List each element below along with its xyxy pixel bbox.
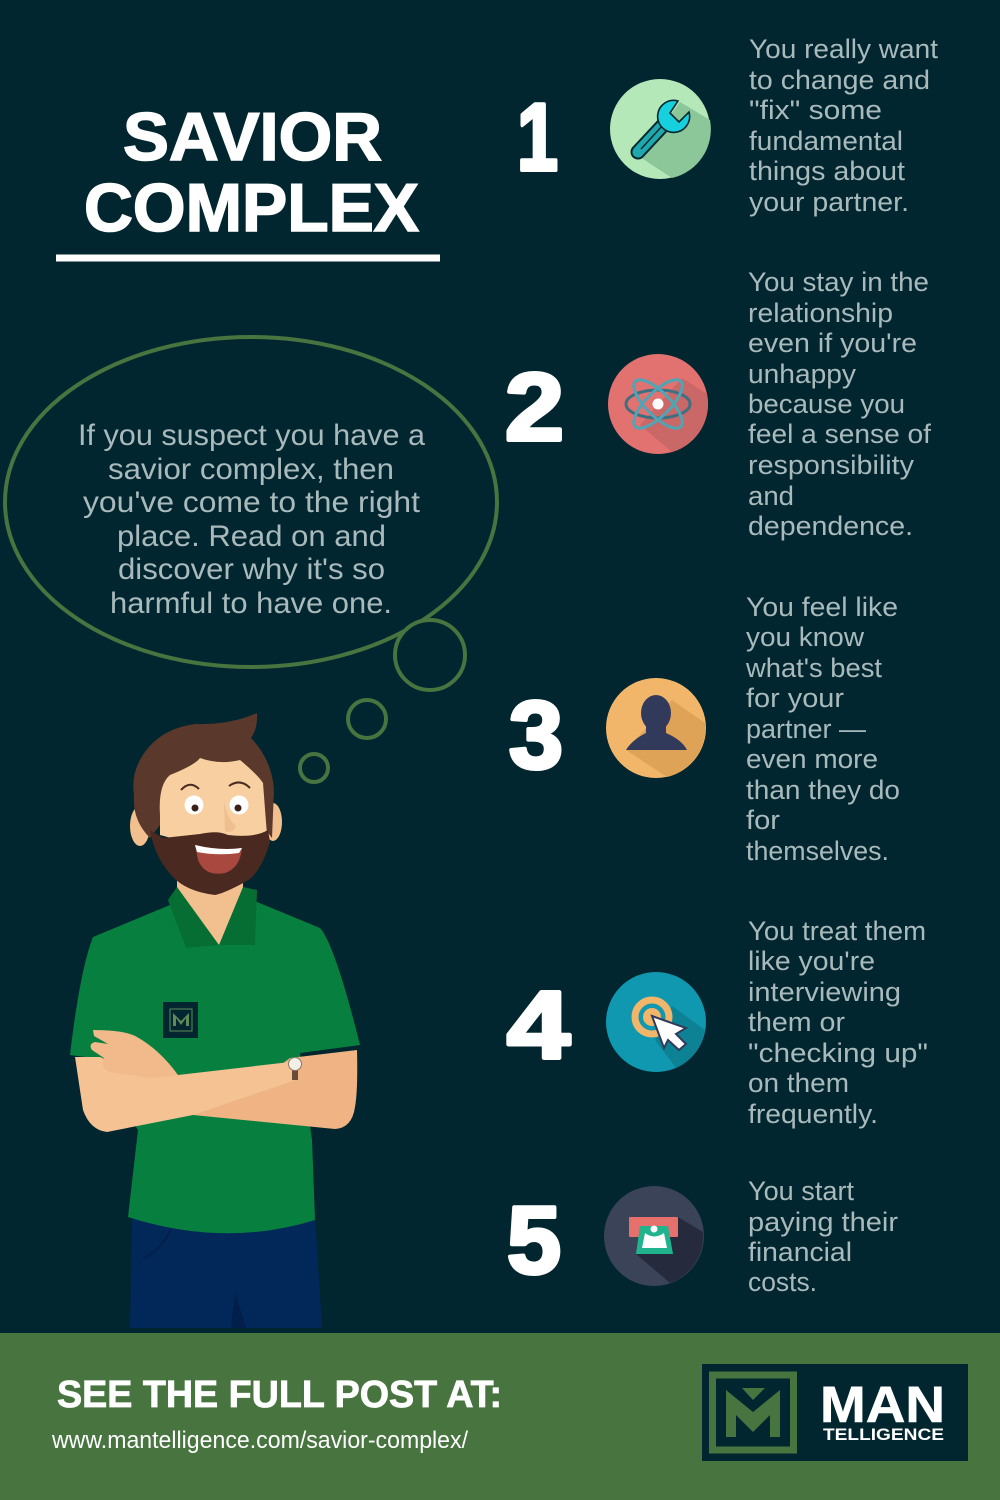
shirt: [70, 902, 360, 1233]
eyes: [181, 782, 250, 814]
text 3: You feel like: [746, 592, 898, 622]
text 2: because you: [748, 389, 905, 419]
number 5: 5: [507, 1187, 561, 1294]
collar: [168, 887, 257, 948]
text 4: "checking up": [748, 1038, 928, 1068]
item 3: [509, 592, 900, 866]
footer band: [0, 1333, 1000, 1500]
text 2: unhappy: [748, 359, 857, 389]
text 1: You really want: [749, 34, 939, 64]
text 2: relationship: [748, 298, 893, 328]
text 2: and: [748, 481, 794, 511]
text 5: paying their: [748, 1207, 898, 1237]
text 3: you know: [746, 622, 865, 652]
item 2: [505, 267, 932, 541]
item 4: [507, 916, 928, 1129]
beard: [150, 830, 270, 895]
nose: [224, 802, 236, 832]
neck: [177, 880, 243, 945]
hair: [133, 713, 274, 838]
text 4: frequently.: [748, 1099, 878, 1129]
text 3: [745, 592, 900, 866]
text 2: even if you're: [748, 328, 917, 358]
text 2: responsibility: [748, 450, 915, 480]
text 3: even more: [746, 744, 878, 774]
text 4: on them: [748, 1068, 849, 1098]
item 5: [507, 1176, 898, 1297]
number 2: 2: [505, 354, 564, 461]
logo: MAN: [820, 1376, 945, 1433]
thought bubble: If you suspect you have a: [78, 419, 425, 452]
text 5: You start: [748, 1176, 854, 1206]
text 3: partner —: [746, 714, 866, 744]
icon: atom: [608, 354, 708, 454]
text 3: than they do: [746, 775, 900, 805]
ears: [130, 806, 150, 846]
title: COMPLEX: [84, 170, 419, 246]
title: [56, 99, 440, 262]
thought bubble: [5, 337, 497, 782]
text 1: [749, 34, 939, 217]
icon: cash machine: [604, 1186, 704, 1286]
text 2: [748, 267, 932, 541]
number 4: 4: [507, 972, 570, 1079]
logo: TELLIGENCE: [823, 1425, 944, 1444]
watch: [288, 1058, 302, 1080]
hand: [91, 1030, 178, 1078]
thought bubble: harmful to have one.: [110, 587, 392, 620]
thought bubble: savior complex, then: [108, 453, 394, 486]
text 2: feel a sense of: [748, 419, 932, 449]
number 3: 3: [509, 682, 563, 789]
text 1: things about: [749, 156, 906, 186]
text 5: financial: [748, 1237, 852, 1267]
text 1: "fix" some: [749, 95, 882, 125]
text 3: themselves.: [746, 836, 889, 866]
trousers: [130, 1215, 322, 1328]
footer heading: SEE THE FULL POST AT:: [57, 1374, 502, 1416]
footer url: www.mantelligence.com/savior-complex/: [51, 1427, 468, 1454]
logo: [702, 1364, 968, 1461]
icon: person: [606, 678, 706, 778]
right arm: [193, 1050, 357, 1129]
title: SAVIOR: [123, 99, 382, 175]
icon: wrench: [610, 79, 711, 179]
text 5: costs.: [748, 1267, 817, 1297]
text 4: like you're: [748, 946, 875, 976]
shirt badge: [163, 1002, 198, 1038]
mouth: [195, 845, 242, 874]
text 3: for your: [746, 683, 844, 713]
face: [160, 758, 267, 850]
text 2: dependence.: [748, 511, 913, 541]
thought bubble: you've come to the right: [83, 486, 421, 519]
text 2: You stay in the: [748, 267, 929, 297]
thought bubble: place. Read on and: [117, 520, 386, 553]
text 1: to change and: [749, 65, 930, 95]
text 4: [748, 916, 928, 1129]
text 3: what's best: [745, 653, 882, 683]
icon: target and cursor: [606, 972, 706, 1072]
thought bubble: discover why it's so: [118, 553, 385, 586]
text 5: [748, 1176, 898, 1297]
text 4: interviewing: [748, 977, 901, 1007]
text 1: your partner.: [749, 187, 909, 217]
text 3: for: [746, 805, 780, 835]
left arm: [75, 1057, 296, 1132]
text 4: You treat them: [748, 916, 926, 946]
item 1: [517, 34, 939, 217]
character: bearded man with crossed arms: [70, 713, 360, 1328]
text 4: them or: [748, 1007, 845, 1037]
number 1: 1: [517, 84, 558, 191]
text 1: fundamental: [749, 126, 903, 156]
